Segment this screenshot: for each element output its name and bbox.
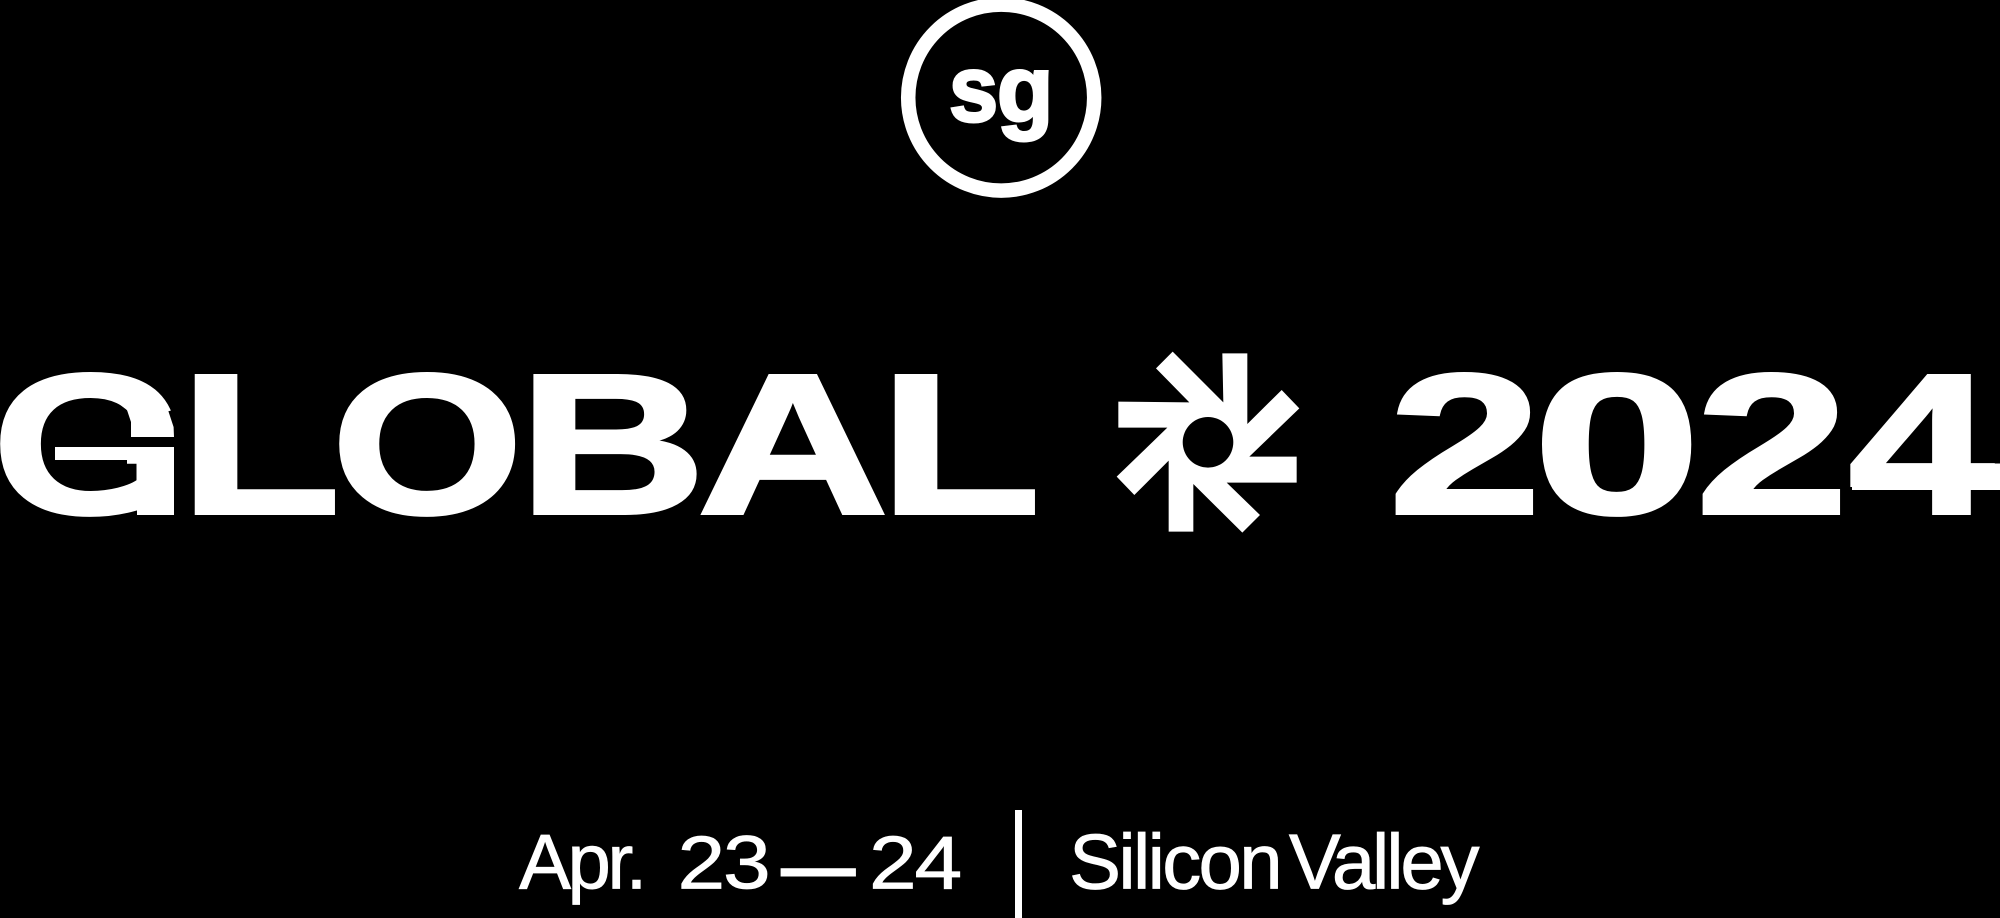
event location: Silicon Valley — [1069, 818, 1479, 906]
title: GLOBAL: A — [697, 332, 889, 556]
title: GLOBAL: L — [879, 332, 1041, 556]
event date: — — [782, 822, 855, 909]
title: GLOBAL: B — [518, 333, 706, 556]
title: 2024: 0 — [1533, 333, 1701, 556]
event date: 23 — [678, 822, 769, 905]
title: 2024: 4 — [1849, 333, 1994, 556]
icon: pinwheel star — [1117, 352, 1299, 533]
title: 2024: 2 — [1388, 333, 1542, 556]
event date: 24 — [869, 822, 960, 905]
event date — [519, 818, 960, 909]
divider between date and location — [1015, 810, 1022, 918]
title: GLOBAL: O — [331, 333, 523, 556]
title: 2024 — [1388, 333, 2000, 556]
event date: Apr. — [519, 818, 644, 906]
title: GLOBAL — [0, 332, 1041, 556]
title: GLOBAL: L — [179, 332, 341, 556]
title: 2024: 2 — [1695, 333, 1849, 556]
logo: sg in a circle — [908, 5, 1094, 191]
logo: sg in a circle: s — [949, 36, 998, 142]
G crossbar and terminal refinements — [55, 380, 182, 515]
logo: sg in a circle: g — [997, 36, 1053, 141]
crossbar extension of the 4 — [1852, 464, 2000, 490]
